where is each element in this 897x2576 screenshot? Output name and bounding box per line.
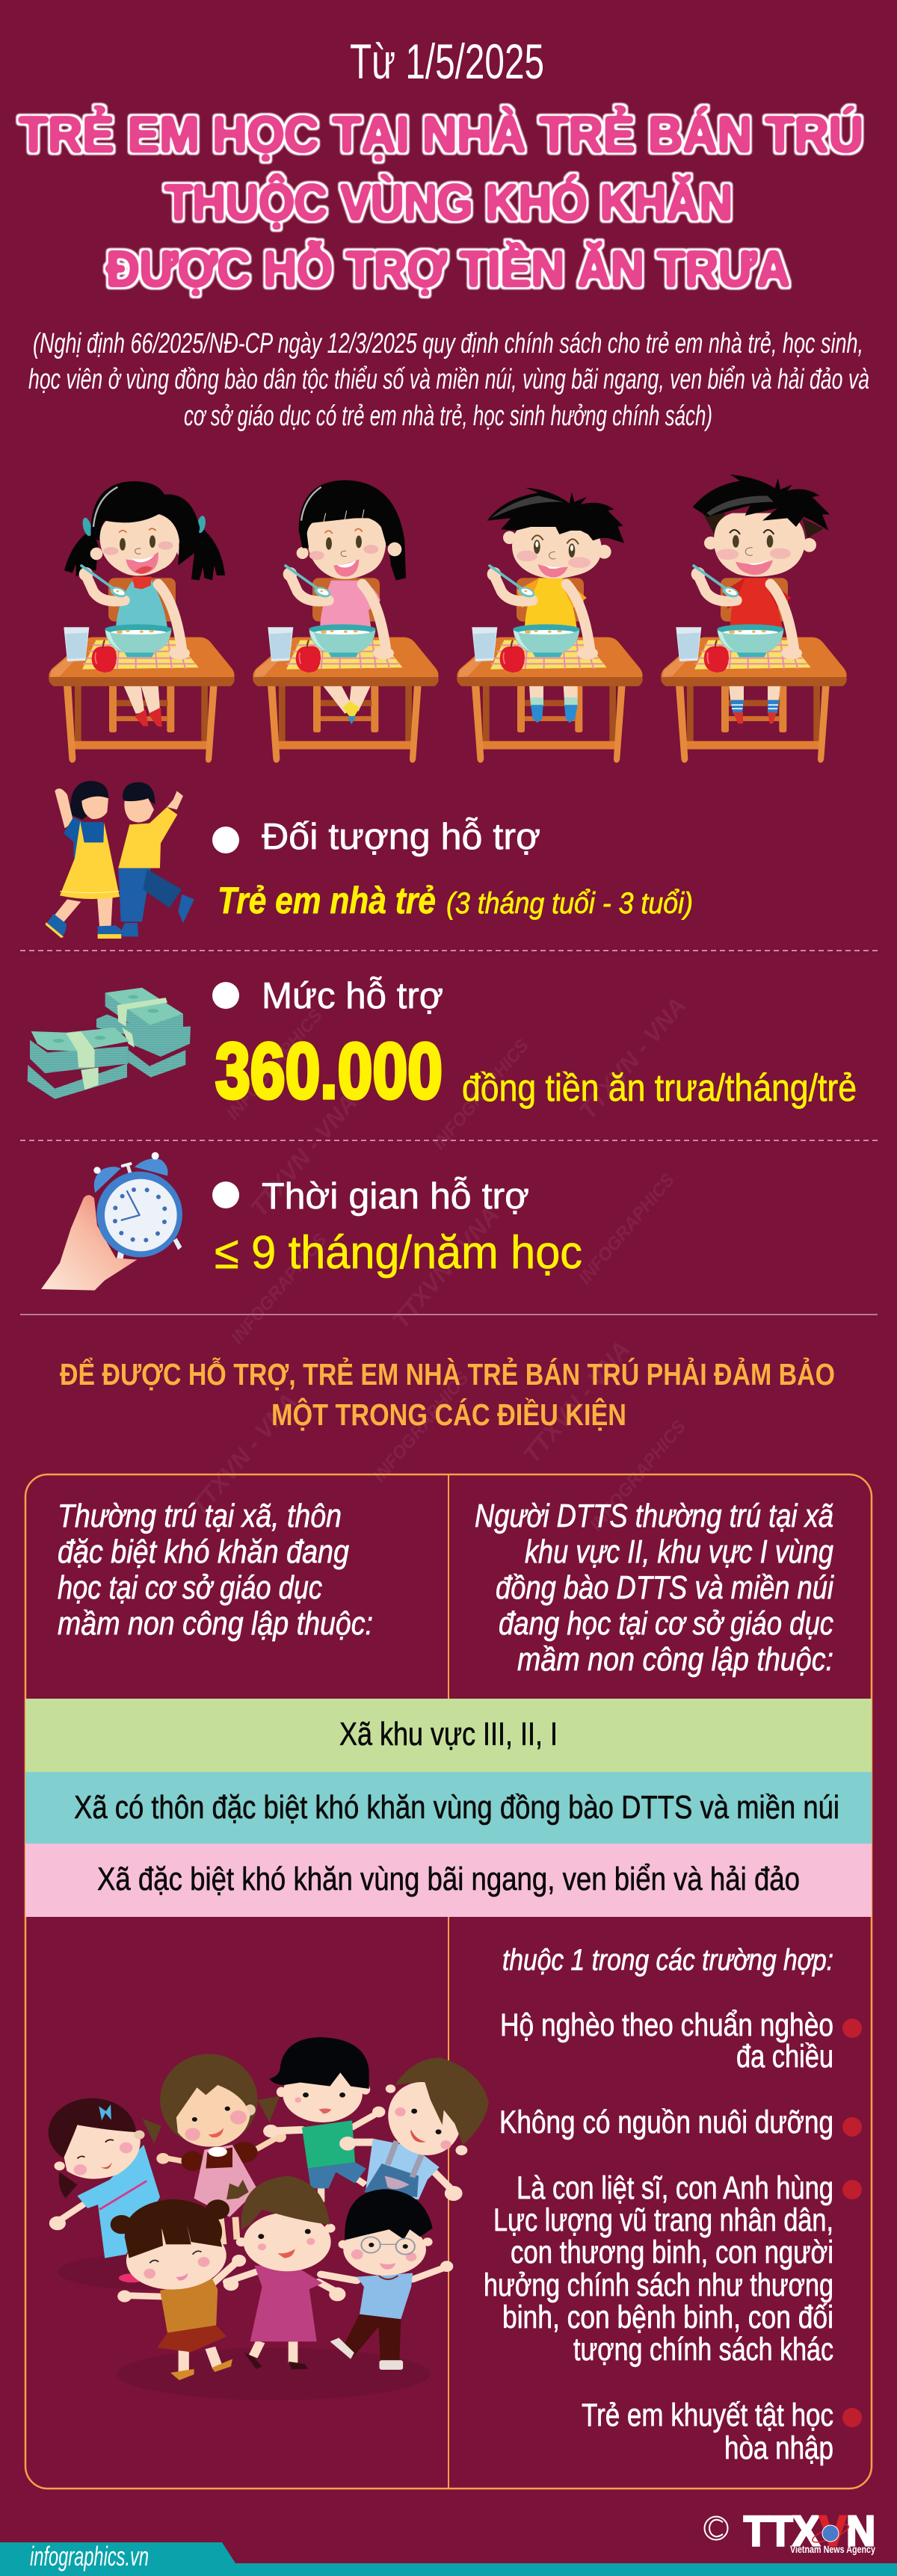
bullet: target group: [212, 827, 239, 853]
subtitle: legal reference: [28, 328, 869, 432]
watermarks: TTXVN - VNA: [185, 1388, 302, 1520]
list item: poor household: đa chiều: [736, 2039, 833, 2075]
text: right column condition: [475, 1498, 834, 1678]
text: website: infographics.vn: [30, 2541, 149, 2572]
illustration: girl 1 eating at desk: [49, 481, 235, 763]
title: TRẺ EM HỌC TẠI NHÀ TRẺ BÁN TRÚ: [19, 105, 863, 163]
child: girl with hair buns: [111, 2199, 246, 2380]
watermarks: INFOGRAPHICS: [586, 1417, 690, 1535]
child: boy with glasses: [321, 2189, 453, 2370]
footer band: [0, 2542, 897, 2576]
text: left column condition: [58, 1498, 373, 1642]
date heading: Từ 1/5/2025: [350, 34, 544, 89]
text: right column condition: Người DTTS thường trú tại xã: [475, 1498, 833, 1534]
watermarks: TTXVN - VNA: [387, 1201, 504, 1333]
watermarks: INFOGRAPHICS: [223, 1006, 327, 1124]
text: target group value: Trẻ em nhà trẻ: [218, 880, 436, 921]
bullet: duration: [212, 1182, 239, 1208]
text: duration value: ≤ 9 tháng/năm học: [215, 1227, 582, 1279]
heading: conditions: [60, 1356, 835, 1432]
list item: disabled children: hòa nhập: [724, 2430, 833, 2466]
watermarks: TTXVN - VNA: [245, 1089, 362, 1221]
child: boy in green shirt: [263, 2037, 385, 2202]
number: 360.000: 360.000: [215, 1028, 443, 1115]
child: boy in overalls: [339, 2057, 489, 2201]
text: left column condition: Thường trú tại xã, thôn: [58, 1498, 342, 1534]
heading: support level: Mức hỗ trợ: [262, 976, 443, 1016]
text: right column condition: mầm non công lập thuộc:: [517, 1641, 833, 1678]
band: commune area: Xã khu vực III, II, I: [339, 1716, 558, 1752]
icon: two dancing children: [46, 781, 194, 939]
band: commune with special hamlets: [25, 1772, 872, 1844]
title: [19, 105, 863, 297]
text: target group value: [218, 880, 693, 921]
icon: hand holding alarm clock: [41, 1152, 182, 1291]
illustration: girl 2 eating at desk: [253, 481, 439, 763]
icon: stacks of money: [28, 988, 191, 1099]
panel: conditions table: [25, 1474, 872, 2489]
watermarks: INFOGRAPHICS: [369, 1368, 473, 1486]
list item: policy beneficiaries: [484, 2170, 862, 2367]
heading: conditions: MỘT TRONG CÁC ĐIỀU KIỆN: [271, 1397, 626, 1432]
illustration: boy 2 eating at desk: [661, 475, 847, 763]
child: girl in magenta dress: [224, 2176, 345, 2370]
list item: policy beneficiaries: tượng chính sách khác: [573, 2332, 833, 2367]
watermarks: INFOGRAPHICS: [575, 1170, 679, 1288]
watermarks: TTXVN - VNA: [574, 992, 691, 1124]
watermarks: TTXVN - VNA: [518, 1335, 635, 1468]
text: left column condition: học tại cơ sở giáo dục: [58, 1569, 322, 1606]
watermarks: INFOGRAPHICS: [227, 1230, 331, 1348]
text: right column condition: đồng bào DTTS và miền núi: [496, 1569, 834, 1606]
child: dark-haired girl: [49, 2098, 161, 2258]
list item: poor household: Hộ nghèo theo chuẩn nghèo: [500, 2007, 833, 2043]
illustration: boy 1 eating at desk: [457, 488, 643, 763]
list item: policy beneficiaries: binh, con bệnh binh, con đối: [502, 2299, 833, 2335]
child: girl with pigtails: [156, 2054, 286, 2244]
text: right column condition: khu vực II, khu vực I vùng: [525, 1533, 833, 1570]
list item: disabled children: Trẻ em khuyết tật học: [582, 2397, 833, 2433]
band: commune area: [25, 1699, 872, 1772]
list item: disabled children: [582, 2397, 862, 2466]
text: intro to cases: thuộc 1 trong các trường hợp:: [502, 1944, 833, 1977]
list item: no caregiver: Không có nguồn nuôi dưỡng: [499, 2104, 833, 2140]
text: target group value: (3 tháng tuổi - 3 tuổi): [446, 887, 693, 920]
title: ĐƯỢC HỖ TRỢ TIỀN ĂN TRƯA: [106, 240, 790, 297]
text: right column condition: đang học tại cơ sở giáo dục: [499, 1605, 833, 1642]
heading: target group: Đối tượng hỗ trợ: [262, 817, 540, 857]
bullet: support level: [212, 982, 239, 1009]
heading: duration: Thời gian hỗ trợ: [262, 1176, 529, 1217]
title: THUỘC VÙNG KHÓ KHĂN: [164, 173, 733, 231]
text: left column condition: đặc biệt khó khăn đang: [58, 1533, 349, 1570]
text: left column condition: mầm non công lập thuộc:: [58, 1605, 373, 1642]
watermarks: [185, 992, 691, 1535]
illustration: group of children: [49, 2037, 489, 2400]
copyright symbol: [704, 2517, 728, 2539]
logo: TTXVN: TTXVN: [744, 2507, 875, 2555]
band: coastal and island communes: [25, 1844, 872, 1917]
watermarks: INFOGRAPHICS: [429, 1036, 533, 1154]
list item: poor household: [500, 2007, 862, 2075]
